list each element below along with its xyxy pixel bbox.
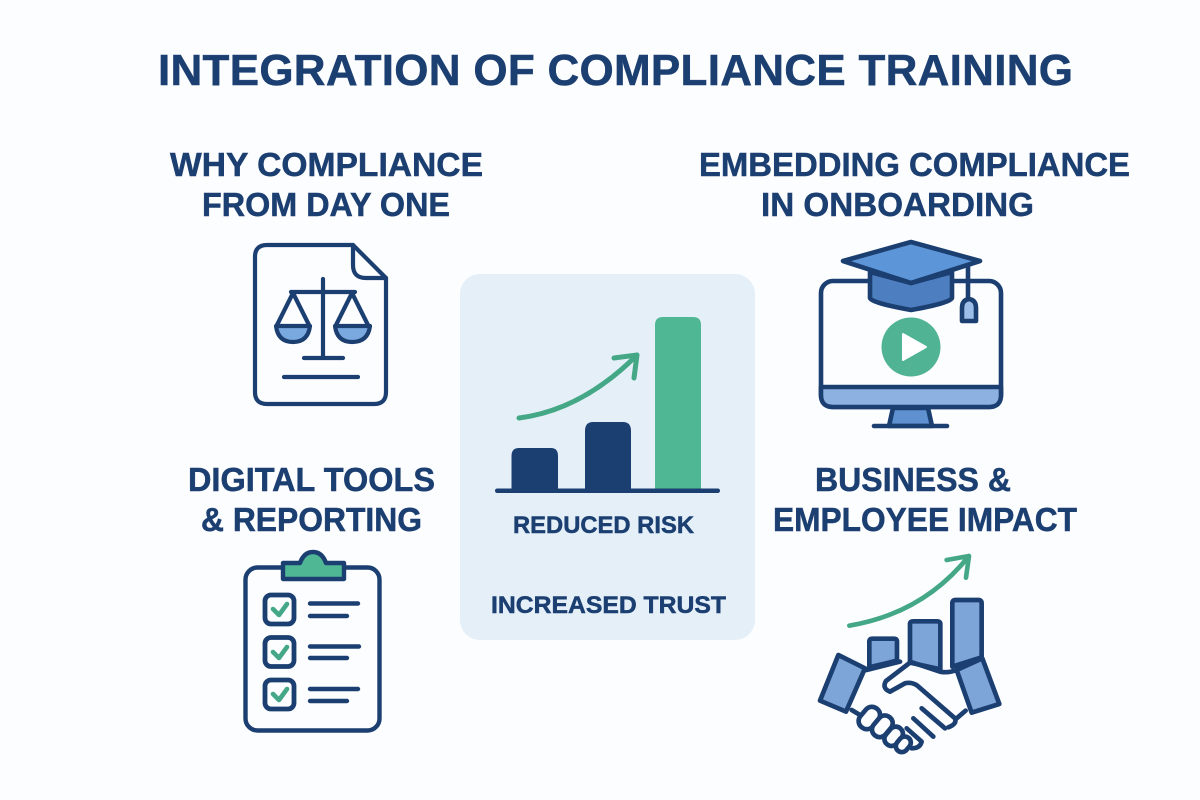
heading: business and employee impact: BUSINESS & [815,461,1011,498]
arrow: upward trend [519,355,637,418]
heading: business and employee impact: EMPLOYEE IMPACT [773,501,1077,538]
heading: business and employee impact [773,461,1077,538]
icon: handshake with rising bars [820,556,999,755]
heading: digital tools and reporting: & REPORTING [201,501,422,538]
bar chart [495,317,720,493]
title: INTEGRATION OF COMPLIANCE TRAINING [158,46,1073,95]
heading: embedding compliance in onboarding: IN ONBOARDING [761,186,1034,223]
label: reduced risk: REDUCED RISK [513,512,695,539]
label: increased trust: INCREASED TRUST [491,592,726,619]
heading: why compliance from day one: FROM DAY ONE [202,186,450,223]
heading: digital tools and reporting: DIGITAL TOOLS [188,461,435,498]
heading: why compliance from day one: WHY COMPLIANCE [170,146,483,183]
arrow: business growth [849,556,969,626]
play button [882,318,940,376]
heading: why compliance from day one [170,146,483,223]
heading: embedding compliance in onboarding: EMBEDDING COMPLIANCE [699,146,1130,183]
icon: clipboard checklist [246,552,380,730]
central panel: outcomes [460,274,755,640]
heading: digital tools and reporting [188,461,435,538]
icon: monitor with graduation cap and play button [821,242,1001,426]
icon: legal document with scales [255,245,386,404]
heading: embedding compliance in onboarding [699,146,1130,223]
